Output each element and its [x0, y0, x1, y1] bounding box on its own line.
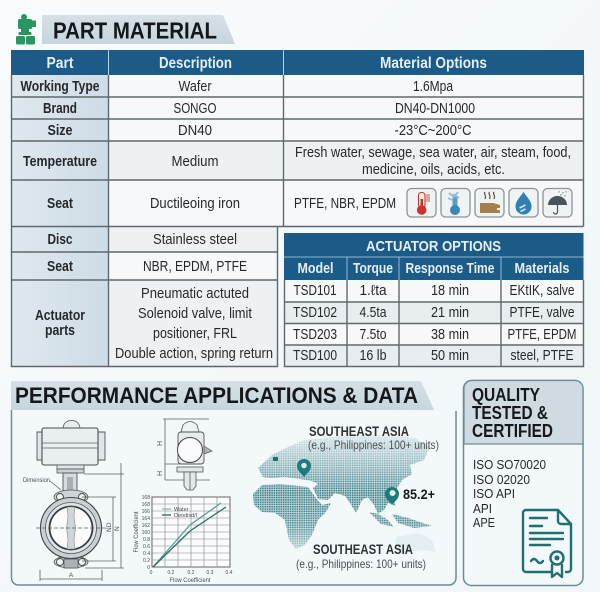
description column — [115, 79, 273, 362]
description column: Wafer — [178, 79, 212, 95]
chart lines — [153, 503, 226, 567]
chart axis labels: 168 — [142, 502, 150, 508]
diagram: valve side view — [157, 419, 212, 490]
table header row: Description — [159, 55, 232, 72]
chart axis labels: 160 — [142, 530, 150, 536]
description column: DN40 — [178, 123, 212, 139]
material options column: DN40-DN1000 — [395, 101, 475, 117]
actuator data rows: PTFE, valve — [510, 305, 574, 321]
chart axis labels: Flow Coefficient — [133, 511, 140, 552]
title: part material: PART MATERIAL — [53, 18, 217, 44]
actuator data rows: 4.5ta — [360, 305, 387, 321]
actuator data rows: 7.5to — [360, 327, 386, 343]
icon: cold thermometer — [441, 188, 470, 217]
row labels: Size — [48, 123, 72, 139]
actuator column headers: Response Time — [406, 260, 494, 277]
actuator column headers: Materials — [514, 260, 570, 277]
actuator data rows — [293, 283, 576, 364]
actuator data rows: 21 min — [431, 305, 469, 321]
diagram labels: ND — [106, 522, 113, 532]
diagram labels — [23, 477, 121, 579]
quality heading: QUALITY — [472, 384, 541, 405]
chart legend — [174, 507, 198, 519]
icon: certificate — [523, 510, 571, 577]
actuator data rows: 50 min — [431, 348, 469, 364]
material options column: -23°C~200°C — [394, 123, 472, 139]
material options column — [294, 79, 571, 212]
callout: southeast asia bottom — [296, 542, 426, 571]
chart axis labels: 0.2 — [168, 570, 175, 576]
chart axis labels: 0.4 — [226, 570, 233, 576]
certification list: API — [473, 501, 492, 516]
row labels: Actuator — [35, 308, 85, 324]
description column: Ductileoing iron — [150, 196, 240, 212]
chart axis labels: 0.2 — [143, 558, 150, 564]
certification list: ISO 02020 — [473, 472, 530, 487]
chart axis labels: 162 — [142, 523, 150, 529]
description column: NBR, EPDM, PTFE — [143, 259, 247, 275]
certification list: ISO API — [473, 486, 515, 501]
chart axis labels: 0.6 — [143, 544, 150, 550]
actuator data rows: TSD100 — [293, 348, 337, 364]
row labels: parts — [45, 323, 75, 339]
chart axis labels: 0.4 — [143, 551, 150, 557]
material options column: 1.6Mpa — [413, 79, 454, 95]
row labels: Seat — [47, 196, 73, 212]
chart axis labels: 168 — [142, 495, 150, 501]
chart axis labels: 0.3 — [207, 570, 214, 576]
callout: southeast asia bottom: SOUTHEAST ASIA — [313, 542, 413, 557]
panel: performance applications frame — [12, 410, 456, 585]
description column: Medium — [172, 154, 218, 170]
chart axis labels: 0 — [147, 565, 150, 571]
actuator data rows: 1.ℓta — [360, 283, 387, 299]
actuator column headers — [298, 260, 570, 277]
map: faint australia — [395, 533, 436, 553]
callout: southeast asia bottom: (e.g., Philippines: 100+ units) — [296, 557, 426, 571]
actuator data rows: 16 lb — [360, 348, 386, 364]
icon: thermometer — [407, 188, 436, 217]
certification list — [473, 457, 546, 530]
row labels: Disc — [48, 232, 72, 248]
chart axis labels: 0.8 — [143, 537, 150, 543]
actuator data rows: TSD102 — [293, 305, 337, 321]
row labels: Working Type — [20, 79, 100, 95]
material options column: PTFE, NBR, EPDM — [294, 196, 396, 212]
actuator data rows: steel, PTFE — [510, 348, 574, 364]
actuator column headers: Torque — [353, 260, 393, 277]
certification list: APE — [473, 515, 495, 530]
panel: actuator options table — [284, 233, 584, 367]
quality heading: CERTIFIED — [472, 420, 553, 441]
actuator data rows: PTFE, EPDM — [508, 327, 576, 343]
table header row: Material Options — [380, 55, 487, 72]
description column: Double action, spring return — [115, 346, 273, 362]
icon: umbrella with rain — [543, 188, 572, 217]
chart axis labels — [133, 495, 233, 584]
actuator data rows: 18 min — [431, 283, 469, 299]
material options column: medicine, oils, acids, etc. — [362, 162, 505, 178]
icon: steam over ground — [475, 188, 504, 217]
actuator data rows: EKtIK, salve — [510, 283, 574, 299]
actuator data rows: 38 min — [431, 327, 469, 343]
callout: southeast asia top: SOUTHEAST ASIA — [309, 424, 409, 439]
callout: southeast asia top: (e.g., Philippines: 100+ units) — [308, 438, 439, 452]
icon: green valve — [16, 14, 36, 44]
table header row — [46, 55, 487, 72]
diagram labels: N — [114, 526, 121, 531]
actuator data rows: TSD203 — [293, 327, 337, 343]
description column: Solenoid valve, limit — [138, 306, 252, 322]
callout: southeast asia top — [308, 424, 439, 452]
chart axis labels: 0.2 — [188, 570, 195, 576]
diagram: butterfly valve front view — [23, 420, 124, 581]
table header row: Part — [46, 55, 74, 72]
panel: quality tested and certified — [464, 380, 583, 586]
chart axis labels: 164 — [142, 516, 150, 522]
diagram: valve side view: H — [157, 441, 164, 446]
icon: water drop — [509, 188, 538, 217]
map: continents — [253, 435, 432, 549]
description column: SONGO — [174, 101, 216, 117]
panel: part material table — [11, 50, 584, 366]
chart axis labels: 166 — [142, 509, 150, 515]
map pin: europe — [297, 459, 311, 477]
map pin: southeast asia — [385, 487, 399, 505]
data label: 85.2+: 85.2+ — [403, 487, 435, 502]
chart legend: Water — [174, 507, 189, 513]
description column: Pneumatic actuted — [141, 286, 249, 302]
chart axis labels: 0 — [150, 570, 153, 576]
chart: flow coefficient line chart — [133, 495, 233, 584]
quality heading: TESTED & — [472, 402, 548, 423]
certification list: ISO SO70020 — [473, 457, 546, 472]
map accent: british isles — [273, 457, 278, 461]
actuator column headers: Model — [298, 260, 334, 277]
heading: performance applications and data: PERFORMANCE APPLICATIONS & DATA — [15, 383, 418, 408]
diagram labels: A — [69, 572, 74, 579]
description column: positioner, FRL — [153, 326, 237, 342]
row labels: Temperature — [23, 154, 97, 170]
actuator table title: ACTUATOR OPTIONS — [366, 238, 501, 255]
diagram: valve side view: H — [157, 471, 164, 476]
row labels: Brand — [43, 101, 77, 117]
map: dotted world map — [253, 435, 436, 553]
chart axis labels: Flow Coefficient — [170, 577, 211, 584]
row labels — [20, 79, 100, 339]
description column: Stainless steel — [153, 232, 237, 248]
row labels: Seat — [47, 259, 73, 275]
chart legend: Deodisd/I — [174, 513, 198, 519]
actuator data rows: TSD101 — [294, 283, 336, 299]
diagram labels: Dimension — [23, 477, 50, 484]
quality heading — [472, 384, 553, 441]
